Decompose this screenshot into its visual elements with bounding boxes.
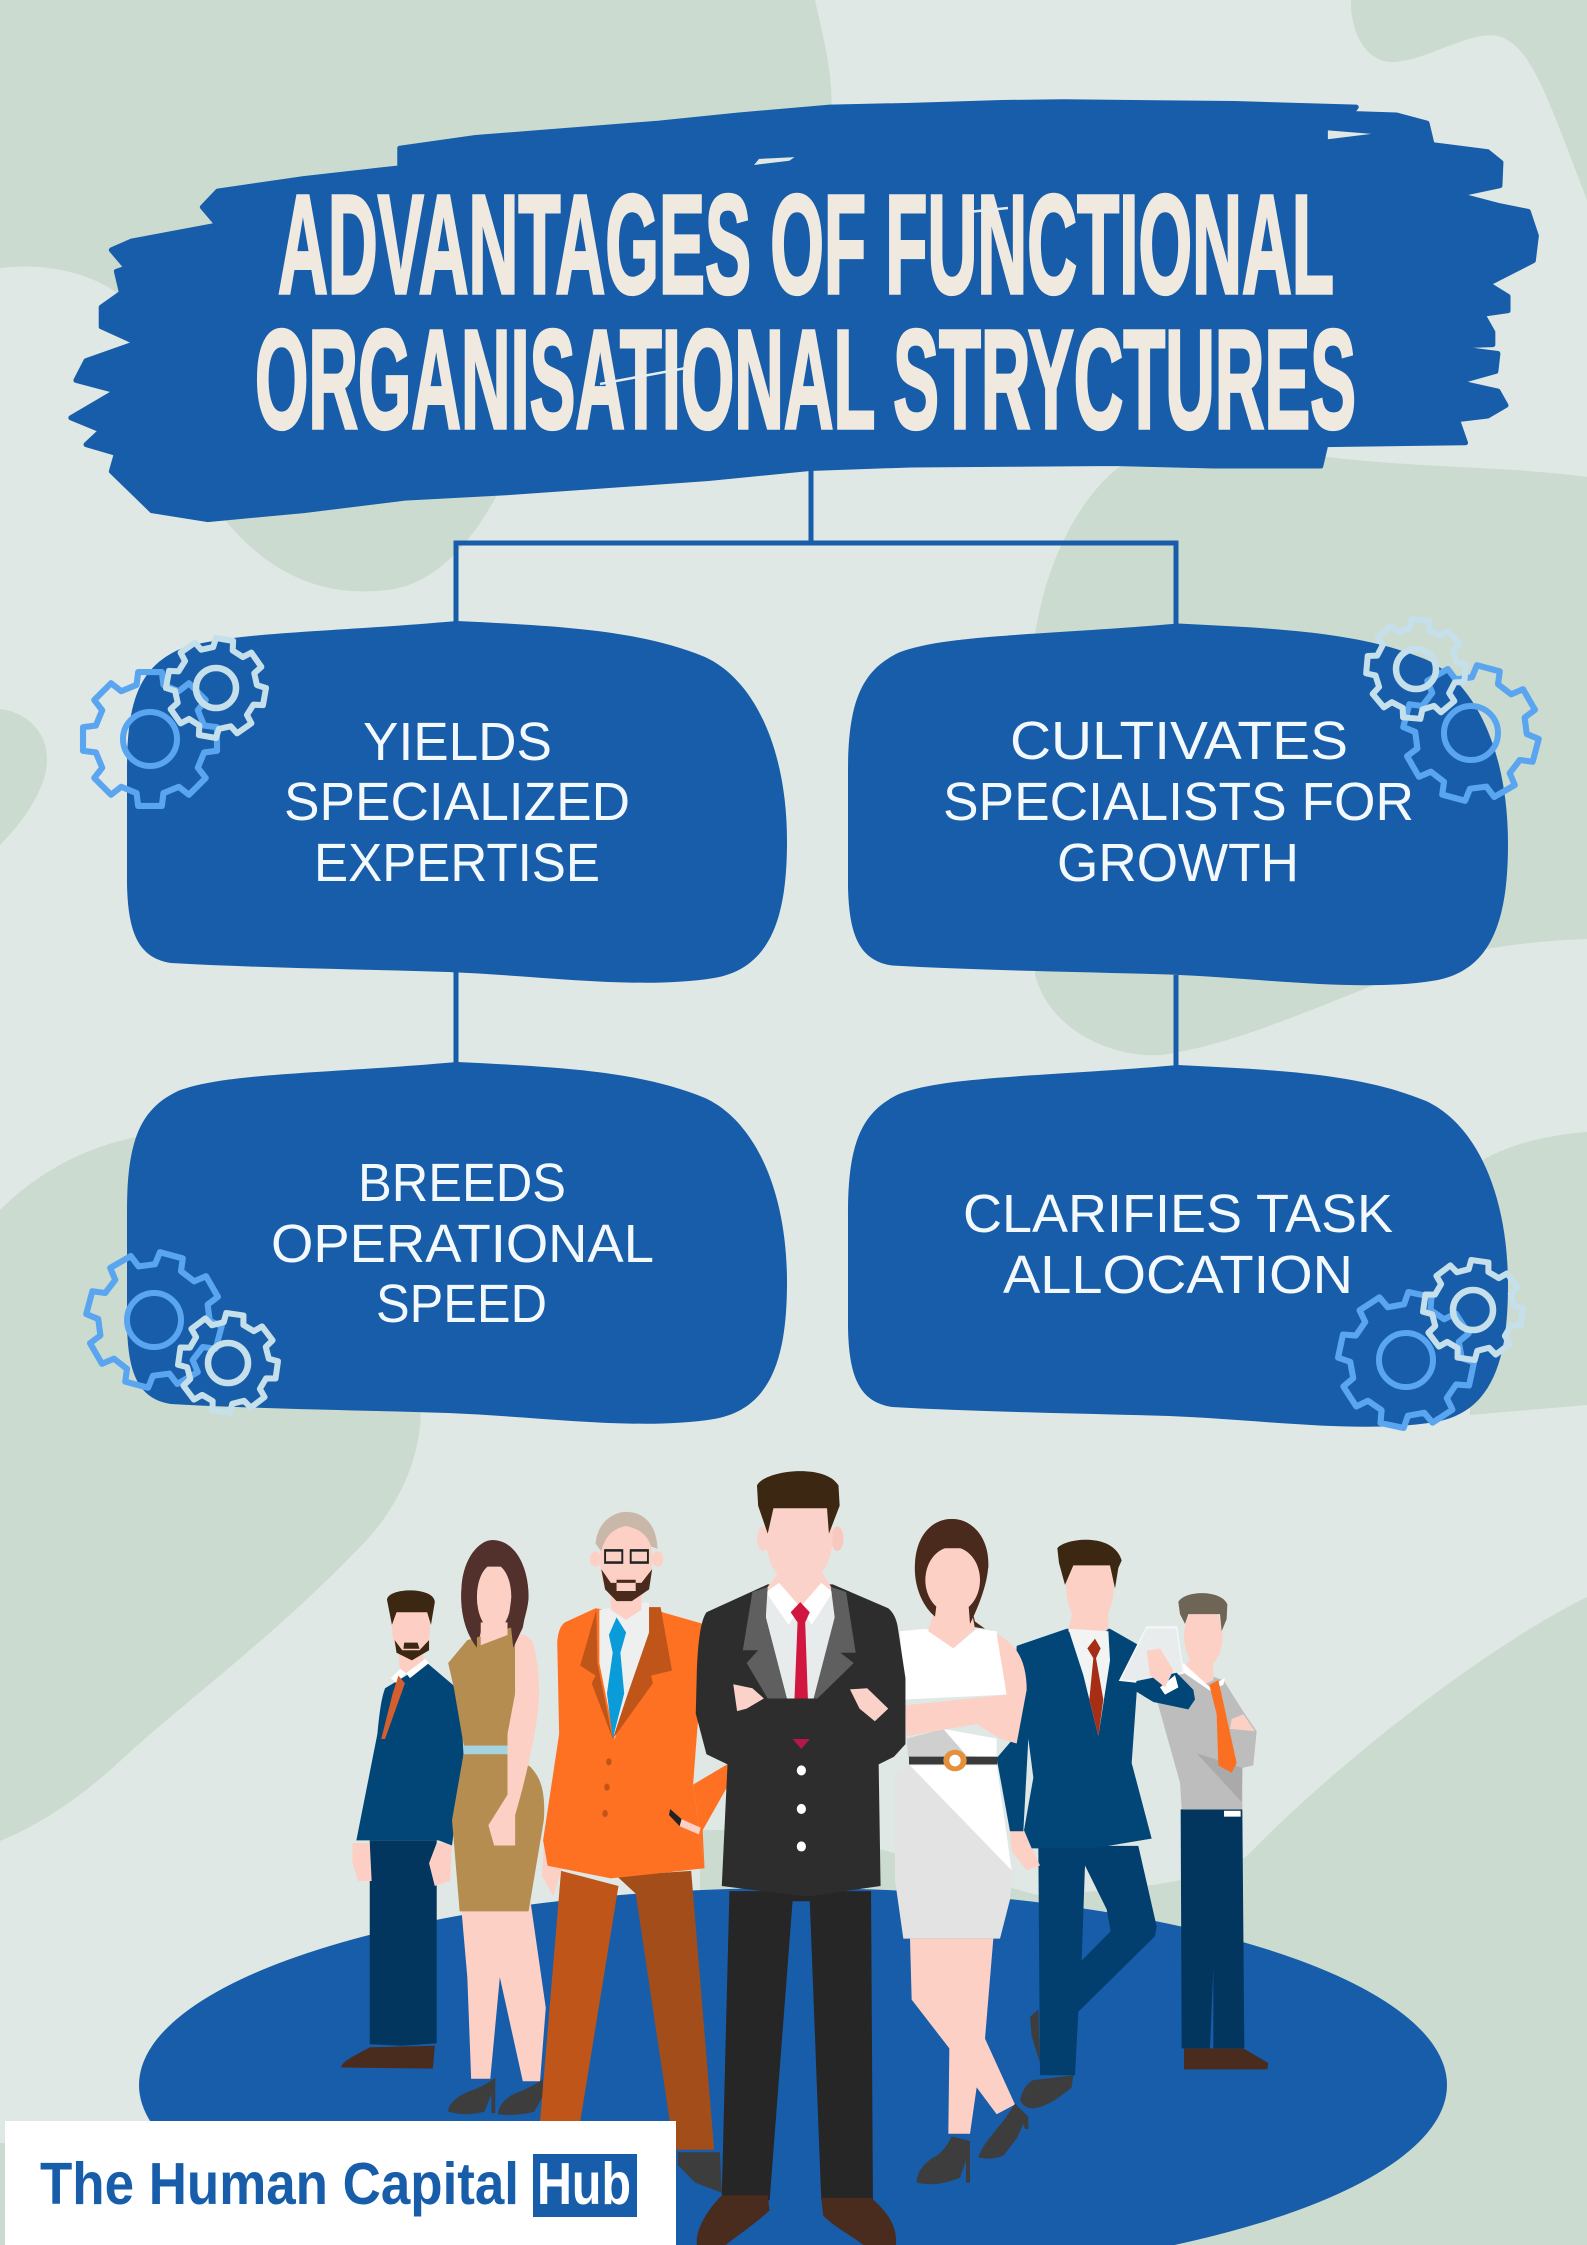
text: cultivates specialists for growth <box>943 711 1414 893</box>
panel: cultivates specialists for growth <box>848 616 1553 985</box>
panel: yields specialized expertise <box>83 621 787 983</box>
icon: gears <box>72 1238 284 1419</box>
person: man in orange suit <box>540 1512 731 2193</box>
person: central man in black suit <box>696 1471 905 2245</box>
person: man in grey shirt with orange tie <box>1157 1593 1268 2069</box>
text: clarifies task allocation <box>963 1184 1393 1305</box>
icon: gears <box>83 631 273 806</box>
person: woman in white dress <box>895 1519 1028 2184</box>
person: man in navy suit with moustache <box>341 1590 463 2069</box>
panel: breeds operational speed <box>72 1062 787 1424</box>
icon: gears <box>1327 1254 1529 1439</box>
text: yields specialized expertise: YIELDS <box>363 712 552 772</box>
logo text: The Human Capital <box>40 2151 519 2217</box>
text: breeds operational speed <box>271 1153 654 1334</box>
floor ellipse <box>139 1888 1447 2245</box>
text: yields specialized expertise: SPECIALIZED <box>284 772 630 832</box>
person: woman in tan dress <box>448 1540 546 2115</box>
text: cultivates specialists for growth: CULTIVATES <box>1010 711 1348 771</box>
connector lines <box>456 465 1176 1070</box>
logo: the human capital hub <box>5 2121 676 2245</box>
text: yields specialized expertise: EXPERTISE <box>314 833 600 893</box>
text: clarifies task allocation: CLARIFIES TASK <box>963 1184 1393 1244</box>
text: breeds operational speed: SPEED <box>376 1274 547 1334</box>
text: clarifies task allocation: ALLOCATION <box>1003 1245 1353 1305</box>
text: breeds operational speed: BREEDS <box>358 1153 566 1213</box>
title <box>255 165 1356 458</box>
text: yields specialized expertise <box>284 712 630 893</box>
text: breeds operational speed: OPERATIONAL <box>271 1214 654 1274</box>
panel: clarifies task allocation <box>848 1065 1529 1439</box>
icon: gears <box>1363 616 1553 815</box>
text: cultivates specialists for growth: SPECIALISTS FOR <box>943 772 1414 832</box>
logo hub badge: Hub <box>537 2151 631 2217</box>
text: cultivates specialists for growth: GROWTH <box>1057 833 1299 893</box>
person: man in navy suit with tablet <box>997 1540 1195 2108</box>
title brush stroke <box>71 102 1536 520</box>
